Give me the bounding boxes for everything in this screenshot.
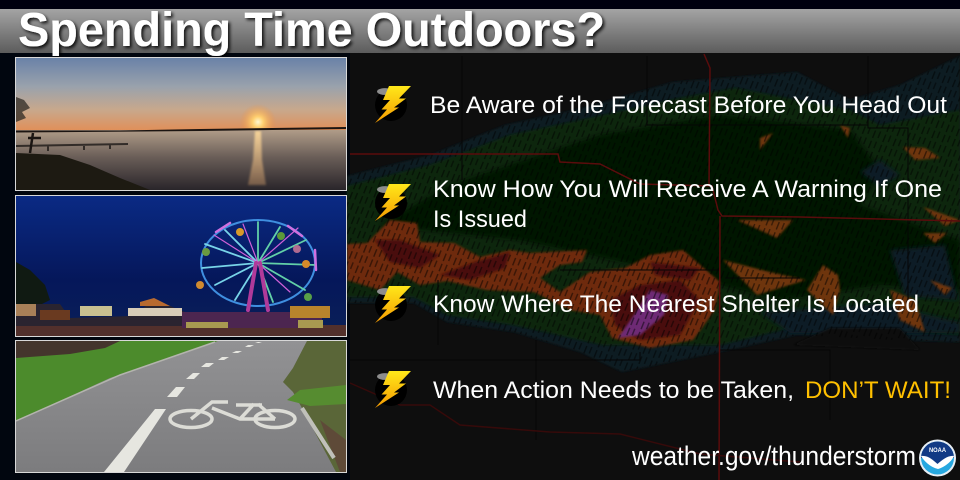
title: Spending Time Outdoors? [18,4,605,57]
radar: dark red cores [375,240,700,340]
radar: blue pockets [760,160,960,333]
text: action [433,377,951,404]
ferris wheel [201,220,316,310]
text: warning: Know How You Will Receive A Warning If One [433,176,942,203]
tree [16,97,30,122]
cross post [28,133,41,153]
text: shelter: Know Where The Nearest Shelter Is Located [433,291,919,318]
map: state borders [350,54,960,480]
text: warning [433,176,942,233]
text: action: When Action Needs to be Taken, [433,377,794,404]
trees [16,262,50,304]
icon: lightning bolt 2 [375,184,411,221]
near shore [16,153,150,190]
radar map background [347,54,960,480]
sky [16,58,346,130]
radar: green band [347,88,960,345]
radar: dark void south east [793,328,920,350]
text: website: weather.gov/thunderstorm [631,441,916,471]
bicycle symbol [170,402,295,428]
icon: lightning bolt 1 [375,86,411,123]
radar: dark green cores [380,115,960,300]
far shoreline [16,127,346,132]
gondolas [196,228,312,301]
top strip [0,0,960,9]
text: forecast: Be Aware of the Forecast Before You Head Out [430,92,947,119]
text: warning: Is Issued [433,206,527,233]
water [16,130,346,190]
radar: blue outer echoes [347,56,960,372]
grass [16,341,218,421]
title bar [0,9,960,53]
text: action: DON’T WAIT! [805,377,951,404]
sun glow [242,106,274,128]
radar: orange main band [347,220,720,348]
photo: lake sunset [16,58,346,190]
midway ground [16,325,346,337]
right verge [283,341,346,472]
fair booths [16,304,184,326]
dock [16,144,128,151]
icon: NOAA logo: NOAA [929,448,947,454]
sun reflection [248,131,266,185]
road [16,341,336,472]
left navy edge [0,0,350,480]
icon: lightning bolt 3 [375,286,411,323]
night sky [16,196,346,336]
photo: ferris wheel at night [16,196,346,337]
icon: NOAA logo [919,440,956,476]
photo: bike path [16,340,346,472]
radar: orange scattered patches [723,125,960,332]
fence [16,341,120,358]
radar: purple hail core [618,290,668,338]
curb [302,408,334,458]
radar: streak texture [347,56,960,372]
cloud wisps [97,143,99,145]
icon: lightning bolt 4 [375,371,411,408]
map: county lines [350,56,908,440]
lane markings [104,342,262,472]
